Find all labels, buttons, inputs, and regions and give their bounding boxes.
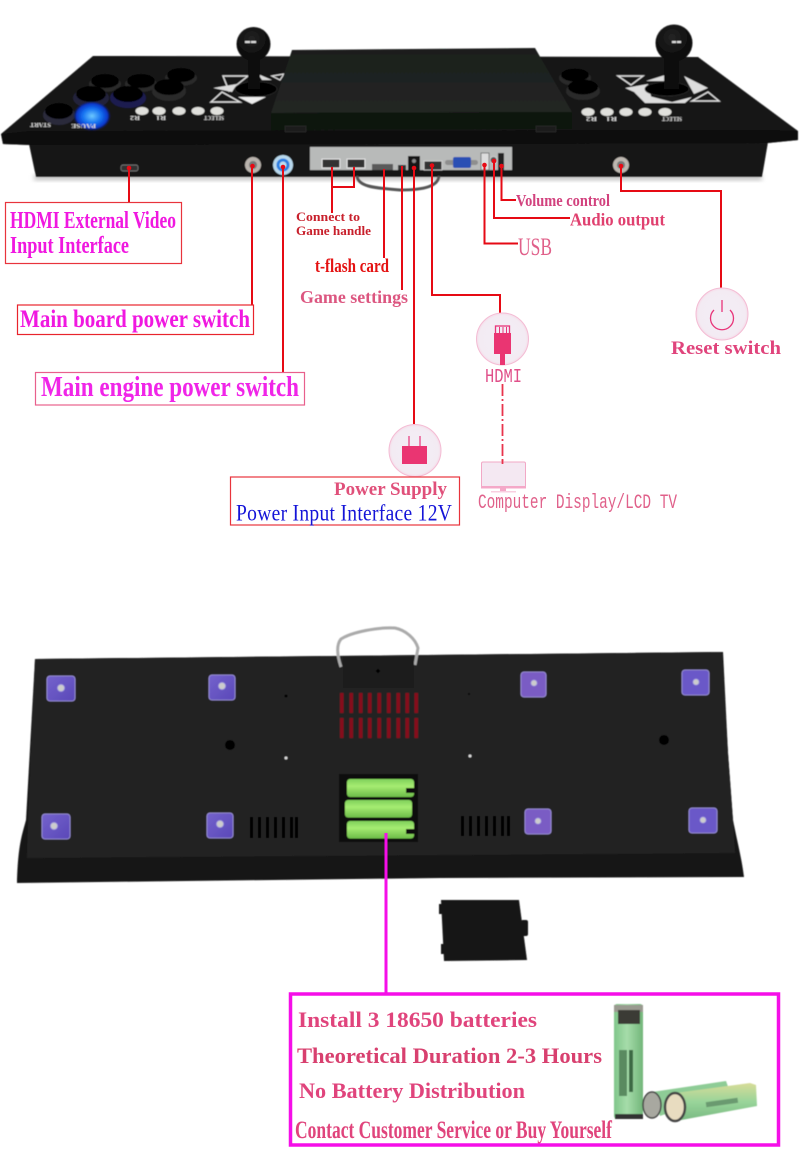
VGA port xyxy=(445,157,478,168)
DC jack xyxy=(408,156,420,170)
left small white buttons xyxy=(136,107,224,115)
label: reset switch: Reset switch xyxy=(671,338,781,359)
callout: power supply: Power Supply xyxy=(334,479,447,500)
left panel print: R2 xyxy=(130,114,140,120)
left joystick xyxy=(235,27,277,96)
label: game settings: Game settings xyxy=(300,287,408,307)
callout: power supply xyxy=(230,477,460,526)
underside plate xyxy=(27,652,735,858)
callout: power supply: Power Input Interface 12V xyxy=(236,500,452,526)
HDMI port xyxy=(424,161,442,170)
photo: console underside xyxy=(17,628,744,961)
left panel print: SELECT xyxy=(204,114,224,120)
plate edge xyxy=(1,130,798,145)
right small white buttons xyxy=(582,108,672,116)
left panel print: PAUSE xyxy=(71,122,96,128)
right panel print xyxy=(586,115,682,121)
carry handle wire xyxy=(338,628,418,667)
audio jack xyxy=(490,156,497,164)
battery photo xyxy=(614,1004,757,1121)
label: audio output: Audio output xyxy=(570,210,665,230)
lying batteries xyxy=(643,1081,757,1121)
callout: main engine power switch: Main engine power switch xyxy=(41,372,299,403)
panel: battery notes xyxy=(290,994,778,1145)
red vent slots xyxy=(340,693,418,738)
handle block xyxy=(343,657,414,688)
battery compartment xyxy=(339,774,418,842)
callout: HDMI external video input: Input Interface xyxy=(10,233,129,259)
speaker vents xyxy=(250,816,510,838)
console top plate xyxy=(1,56,798,145)
left panel print: R1 xyxy=(156,114,166,120)
label: computer display / LCD TV: Computer Display/LCD TV xyxy=(478,492,677,515)
magenta callout line to batteries xyxy=(384,833,388,994)
note: no battery distribution: No Battery Distribution xyxy=(299,1078,525,1103)
right direction arrows xyxy=(618,75,719,103)
settings switch xyxy=(398,165,406,170)
console shadow xyxy=(34,175,762,180)
right panel print: R1 xyxy=(606,115,617,121)
micro HDMI port xyxy=(121,165,138,171)
reset switch xyxy=(613,157,629,173)
right action buttons xyxy=(559,68,600,100)
callout: HDMI external video input xyxy=(6,202,182,264)
label: volume control: Volume control xyxy=(516,191,610,210)
right joystick xyxy=(645,24,692,96)
label: connect to game handle xyxy=(296,210,371,238)
main engine switch xyxy=(273,155,293,175)
carry handle xyxy=(357,176,439,190)
note: contact customer service: Contact Customer Service or Buy Yourself xyxy=(295,1117,612,1144)
callout: main board power switch: Main board power switch xyxy=(20,306,250,333)
battery cover xyxy=(439,900,528,961)
label: HDMI: HDMI xyxy=(485,366,522,388)
screw holes xyxy=(225,693,669,760)
right panel print: R2 xyxy=(586,115,597,121)
icon: HDMI plug xyxy=(476,313,528,365)
upright battery xyxy=(614,1004,643,1119)
photo: console front view xyxy=(1,24,798,190)
centre game lid xyxy=(271,48,572,130)
hinge clips xyxy=(285,126,556,132)
left action buttons xyxy=(43,68,197,131)
label: USB: USB xyxy=(518,234,552,261)
icon: computer display xyxy=(481,460,526,492)
icon: power adapter xyxy=(389,424,441,476)
left panel print xyxy=(30,114,224,128)
TF card slot xyxy=(372,164,393,170)
note: theoretical duration: Theoretical Duration 2-3 Hours xyxy=(297,1043,602,1068)
rubber feet xyxy=(42,670,717,839)
underside lip xyxy=(17,652,744,883)
left panel print: START xyxy=(30,121,51,127)
dashed link to display xyxy=(502,384,504,464)
side USB xyxy=(481,153,489,170)
USB handle ports xyxy=(322,159,365,168)
callout lines: top console xyxy=(127,159,721,424)
callout anchor dots xyxy=(127,159,623,170)
label: connect to game handle: Game handle xyxy=(296,224,371,238)
main board switch xyxy=(245,157,261,173)
port panel xyxy=(310,147,512,170)
right panel print: SELECT xyxy=(662,115,682,121)
label: connect to game handle: Connect to xyxy=(296,210,360,224)
note: install batteries: Install 3 18650 batteries xyxy=(298,1007,537,1032)
console body front xyxy=(29,142,768,177)
volume wheel xyxy=(498,153,504,170)
label: t-flash card: t-flash card xyxy=(315,256,389,277)
icon: reset power button xyxy=(696,288,748,340)
callout: HDMI external video input: HDMI External Video xyxy=(10,208,176,234)
left direction arrows xyxy=(211,74,284,104)
